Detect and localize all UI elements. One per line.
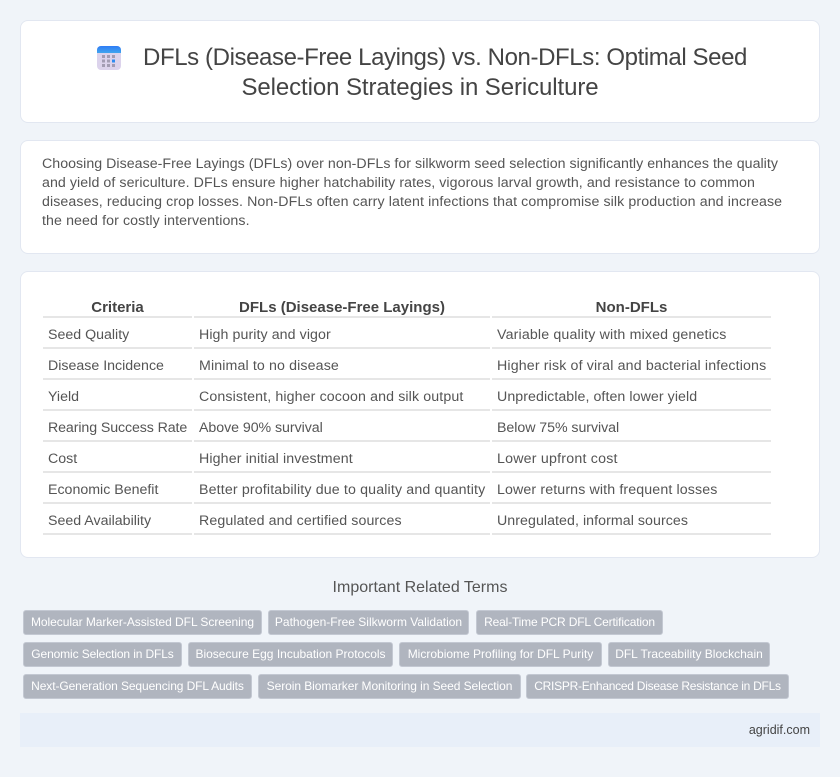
row: seed quality: High purity and vigor — [199, 327, 331, 343]
row: economic benefit — [43, 482, 771, 504]
row: cost — [43, 451, 771, 473]
tag: Next-Generation Sequencing DFL Audits — [31, 679, 244, 693]
row: cost: Higher initial investment — [199, 451, 353, 467]
table header: DFLs: DFLs (Disease-Free Layings) — [239, 299, 445, 316]
row: seed quality: Seed Quality — [48, 327, 129, 343]
row: disease incidence: Disease Incidence — [48, 358, 164, 374]
tag list — [23, 610, 789, 699]
tag — [399, 642, 602, 667]
panel: header — [20, 20, 820, 123]
table header: Non-DFLs — [492, 299, 771, 318]
tag — [23, 674, 252, 699]
tag: Genomic Selection in DFLs — [31, 647, 174, 661]
tag — [23, 610, 262, 635]
row: disease incidence: Higher risk of viral and bacterial infections — [497, 358, 766, 374]
tag — [23, 642, 182, 667]
text block: intro — [42, 156, 782, 229]
row: disease incidence — [43, 358, 771, 380]
text block: intro: Choosing Disease-Free Layings (DFLs) over non-DFLs for silkworm seed selection significantly enhances the quality — [42, 156, 778, 172]
row: rearing success rate — [43, 420, 771, 442]
row: yield: Unpredictable, often lower yield — [497, 389, 697, 405]
text block: intro: diseases, reducing crop losses. Non-DFLs often carry latent infections that compromise silk production and increase — [42, 194, 782, 210]
panel: comparison table — [20, 271, 820, 558]
tag: Microbiome Profiling for DFL Purity — [408, 647, 593, 661]
tag — [188, 642, 393, 667]
row: seed availability: Unregulated, informal sources — [497, 513, 688, 529]
heading: related terms: Important Related Terms — [333, 579, 507, 596]
title: Selection Strategies in Sericulture — [241, 74, 599, 101]
row: seed availability: Regulated and certified sources — [199, 513, 402, 529]
row: rearing success rate: Above 90% survival — [199, 420, 323, 436]
tag: Seroin Biomarker Monitoring in Seed Selection — [267, 679, 512, 693]
row: cost: Cost — [48, 451, 77, 467]
row: seed quality — [43, 327, 771, 349]
row: seed availability — [43, 513, 771, 535]
row: rearing success rate: Rearing Success Rate — [48, 420, 187, 436]
tag — [608, 642, 770, 667]
row: seed availability: Seed Availability — [48, 513, 151, 529]
row: yield: Yield — [48, 389, 79, 405]
table header: Non-DFLs: Non-DFLs — [596, 299, 667, 316]
icon: calendar — [97, 46, 121, 70]
tag: Pathogen-Free Silkworm Validation — [275, 615, 462, 629]
text block: intro: and yield of sericulture. DFLs ensure higher hatchability rates, vigorous larval growth, and resistance to common — [42, 175, 755, 191]
row: seed quality: Variable quality with mixed genetics — [497, 327, 726, 343]
tag — [258, 674, 521, 699]
row: disease incidence: Minimal to no disease — [199, 358, 339, 374]
tag: Molecular Marker-Assisted DFL Screening — [31, 615, 254, 629]
footer text: agridif.com — [749, 723, 810, 737]
text block: intro: the need for costly interventions. — [42, 213, 250, 229]
title — [143, 44, 747, 101]
panel: intro — [20, 140, 820, 254]
tag: CRISPR-Enhanced Disease Resistance in DFLs — [534, 679, 781, 693]
row: economic benefit: Lower returns with frequent losses — [497, 482, 718, 498]
row: yield: Consistent, higher cocoon and silk output — [199, 389, 463, 405]
row: yield — [43, 389, 771, 411]
tag — [526, 674, 789, 699]
row: economic benefit: Economic Benefit — [48, 482, 158, 498]
tag: Biosecure Egg Incubation Protocols — [195, 647, 386, 661]
tag — [476, 610, 663, 635]
table header: criteria: Criteria — [91, 299, 144, 316]
row: cost: Lower upfront cost — [497, 451, 618, 467]
row: economic benefit: Better profitability due to quality and quantity — [199, 482, 485, 498]
title: DFLs (Disease-Free Layings) vs. Non-DFLs: Optimal Seed — [143, 44, 747, 71]
tag — [268, 610, 469, 635]
table header: criteria — [43, 299, 192, 318]
table header: DFLs — [194, 299, 490, 318]
footer — [20, 713, 820, 747]
tag: Real-Time PCR DFL Certification — [484, 615, 655, 629]
tag: DFL Traceability Blockchain — [615, 647, 763, 661]
row: rearing success rate: Below 75% survival — [497, 420, 619, 436]
